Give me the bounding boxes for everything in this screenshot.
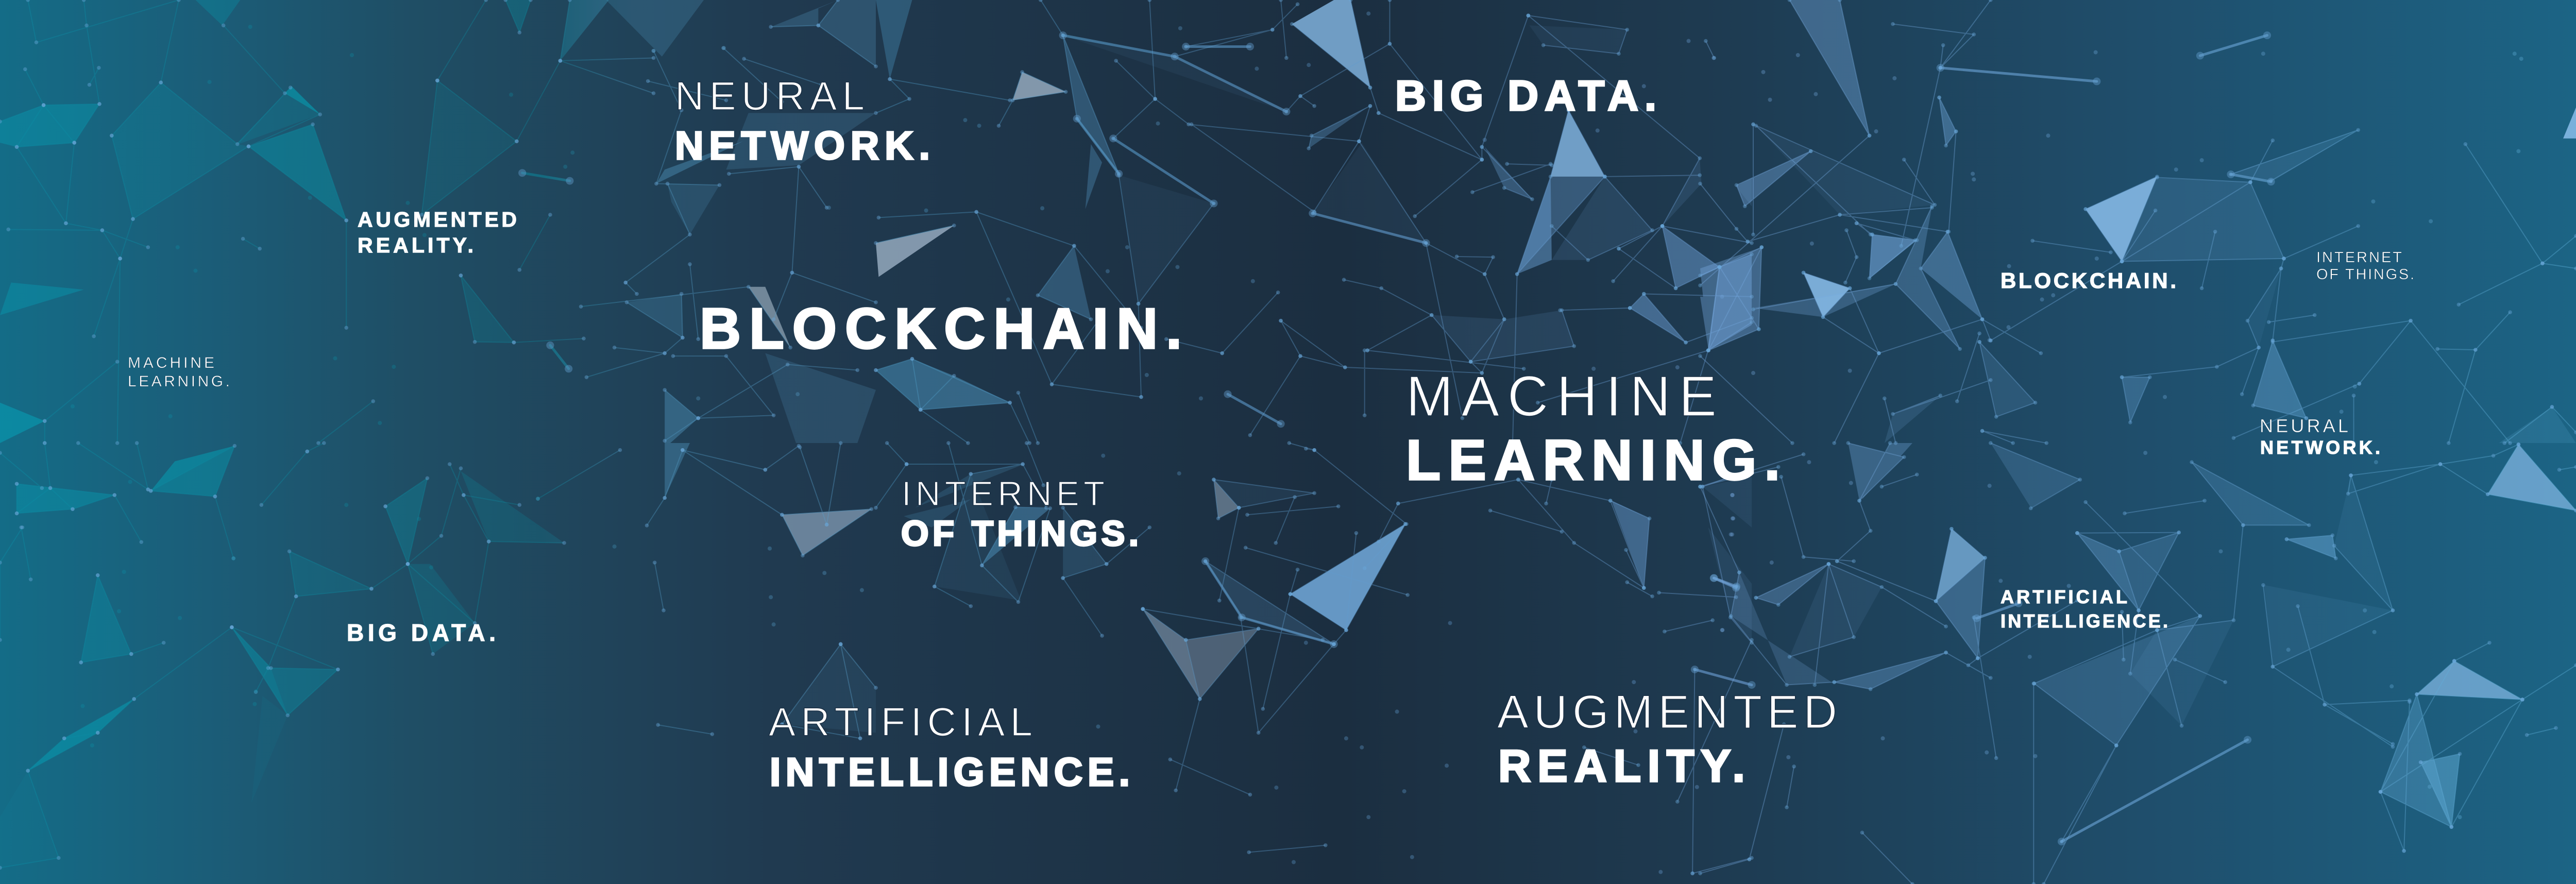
network cluster: bottom centre <box>876 443 1752 873</box>
network cluster: top centre <box>876 0 1752 443</box>
label: augmented reality (large): REALITY. <box>1498 740 1745 791</box>
label: big data (large): BIG DATA. <box>1395 72 1656 120</box>
label: augmented reality (large) <box>1497 686 1837 791</box>
network cluster: bottom right <box>1700 443 2576 884</box>
scattered nodes <box>82 482 862 745</box>
facets <box>1700 0 2576 443</box>
facets <box>1731 443 2460 827</box>
label: neural network (small, right): NETWORK. <box>2260 437 2380 458</box>
facets <box>0 0 876 443</box>
label: machine learning (small, left): MACHINE <box>128 354 214 371</box>
label: internet of things (small, right) <box>2316 249 2414 283</box>
scattered nodes <box>926 13 1722 398</box>
connection lines <box>876 0 1752 443</box>
label: augmented reality (small, left) <box>358 208 517 257</box>
bold links <box>1940 36 2271 182</box>
label: machine learning (large) <box>1406 365 1780 492</box>
connection lines <box>1700 443 2576 884</box>
connection lines <box>0 443 876 868</box>
keyword labels <box>128 72 2414 794</box>
label: neural network (small, right): NEURAL <box>2260 415 2348 436</box>
label: machine learning (large): MACHINE <box>1406 365 1717 428</box>
bright triangles <box>1143 480 1405 699</box>
label: artificial intelligence (centre): INTELLIGENCE. <box>770 750 1130 794</box>
label: machine learning (small, left): LEARNING. <box>128 373 230 390</box>
label: internet of things (centre): OF THINGS. <box>901 514 1139 553</box>
scattered nodes <box>73 27 829 423</box>
facets <box>876 0 1752 410</box>
label: internet of things (centre) <box>901 474 1139 553</box>
label: internet of things (small, right): OF THINGS. <box>2316 266 2414 283</box>
facets <box>0 443 876 868</box>
network cluster: top right <box>1700 0 2576 443</box>
label: artificial intelligence (centre) <box>769 699 1130 794</box>
label: augmented reality (small, left): REALITY. <box>358 233 473 257</box>
label: artificial intelligence (small, right) <box>2001 586 2168 632</box>
connection lines <box>0 0 876 443</box>
label: internet of things (small, right): INTERNET <box>2316 249 2402 266</box>
bold links <box>522 173 570 369</box>
bright triangles <box>1804 107 2576 317</box>
label: neural network (large): NETWORK. <box>675 124 930 168</box>
label: big data (small, left): BIG DATA. <box>347 619 496 646</box>
label: artificial intelligence (centre): ARTIFICIAL <box>769 699 1032 744</box>
label: machine learning (small, left) <box>128 354 230 390</box>
label: augmented reality (small, left): AUGMENTED <box>358 208 517 231</box>
bright triangles <box>1936 445 2576 700</box>
scattered nodes <box>1098 456 1733 872</box>
label: internet of things (centre): INTERNET <box>902 474 1105 513</box>
facets <box>904 464 1752 644</box>
label: neural network (large): NEURAL <box>675 73 865 118</box>
label: blockchain (largest): BLOCKCHAIN. <box>700 297 1182 361</box>
label: neural network (large) <box>675 73 930 168</box>
connection lines <box>876 443 1752 873</box>
scattered nodes <box>1722 453 2460 817</box>
bold links <box>1714 578 2248 842</box>
bold links <box>1206 561 1752 685</box>
label: artificial intelligence (small, right): INTELLIGENCE. <box>2001 610 2168 632</box>
connection lines <box>1700 0 2576 443</box>
network cluster: bottom left <box>0 443 876 868</box>
network cluster: top left <box>0 0 876 443</box>
bold links <box>1063 36 1426 424</box>
label: blockchain (small, right): BLOCKCHAIN. <box>2001 268 2176 293</box>
label: artificial intelligence (small, right): ARTIFICIAL <box>2001 586 2127 607</box>
label: augmented reality (large): AUGMENTED <box>1497 686 1837 738</box>
scattered nodes <box>1753 52 2521 412</box>
label: neural network (small, right) <box>2260 415 2380 458</box>
label: machine learning (large): LEARNING. <box>1406 429 1780 492</box>
bright triangles <box>876 0 1605 277</box>
